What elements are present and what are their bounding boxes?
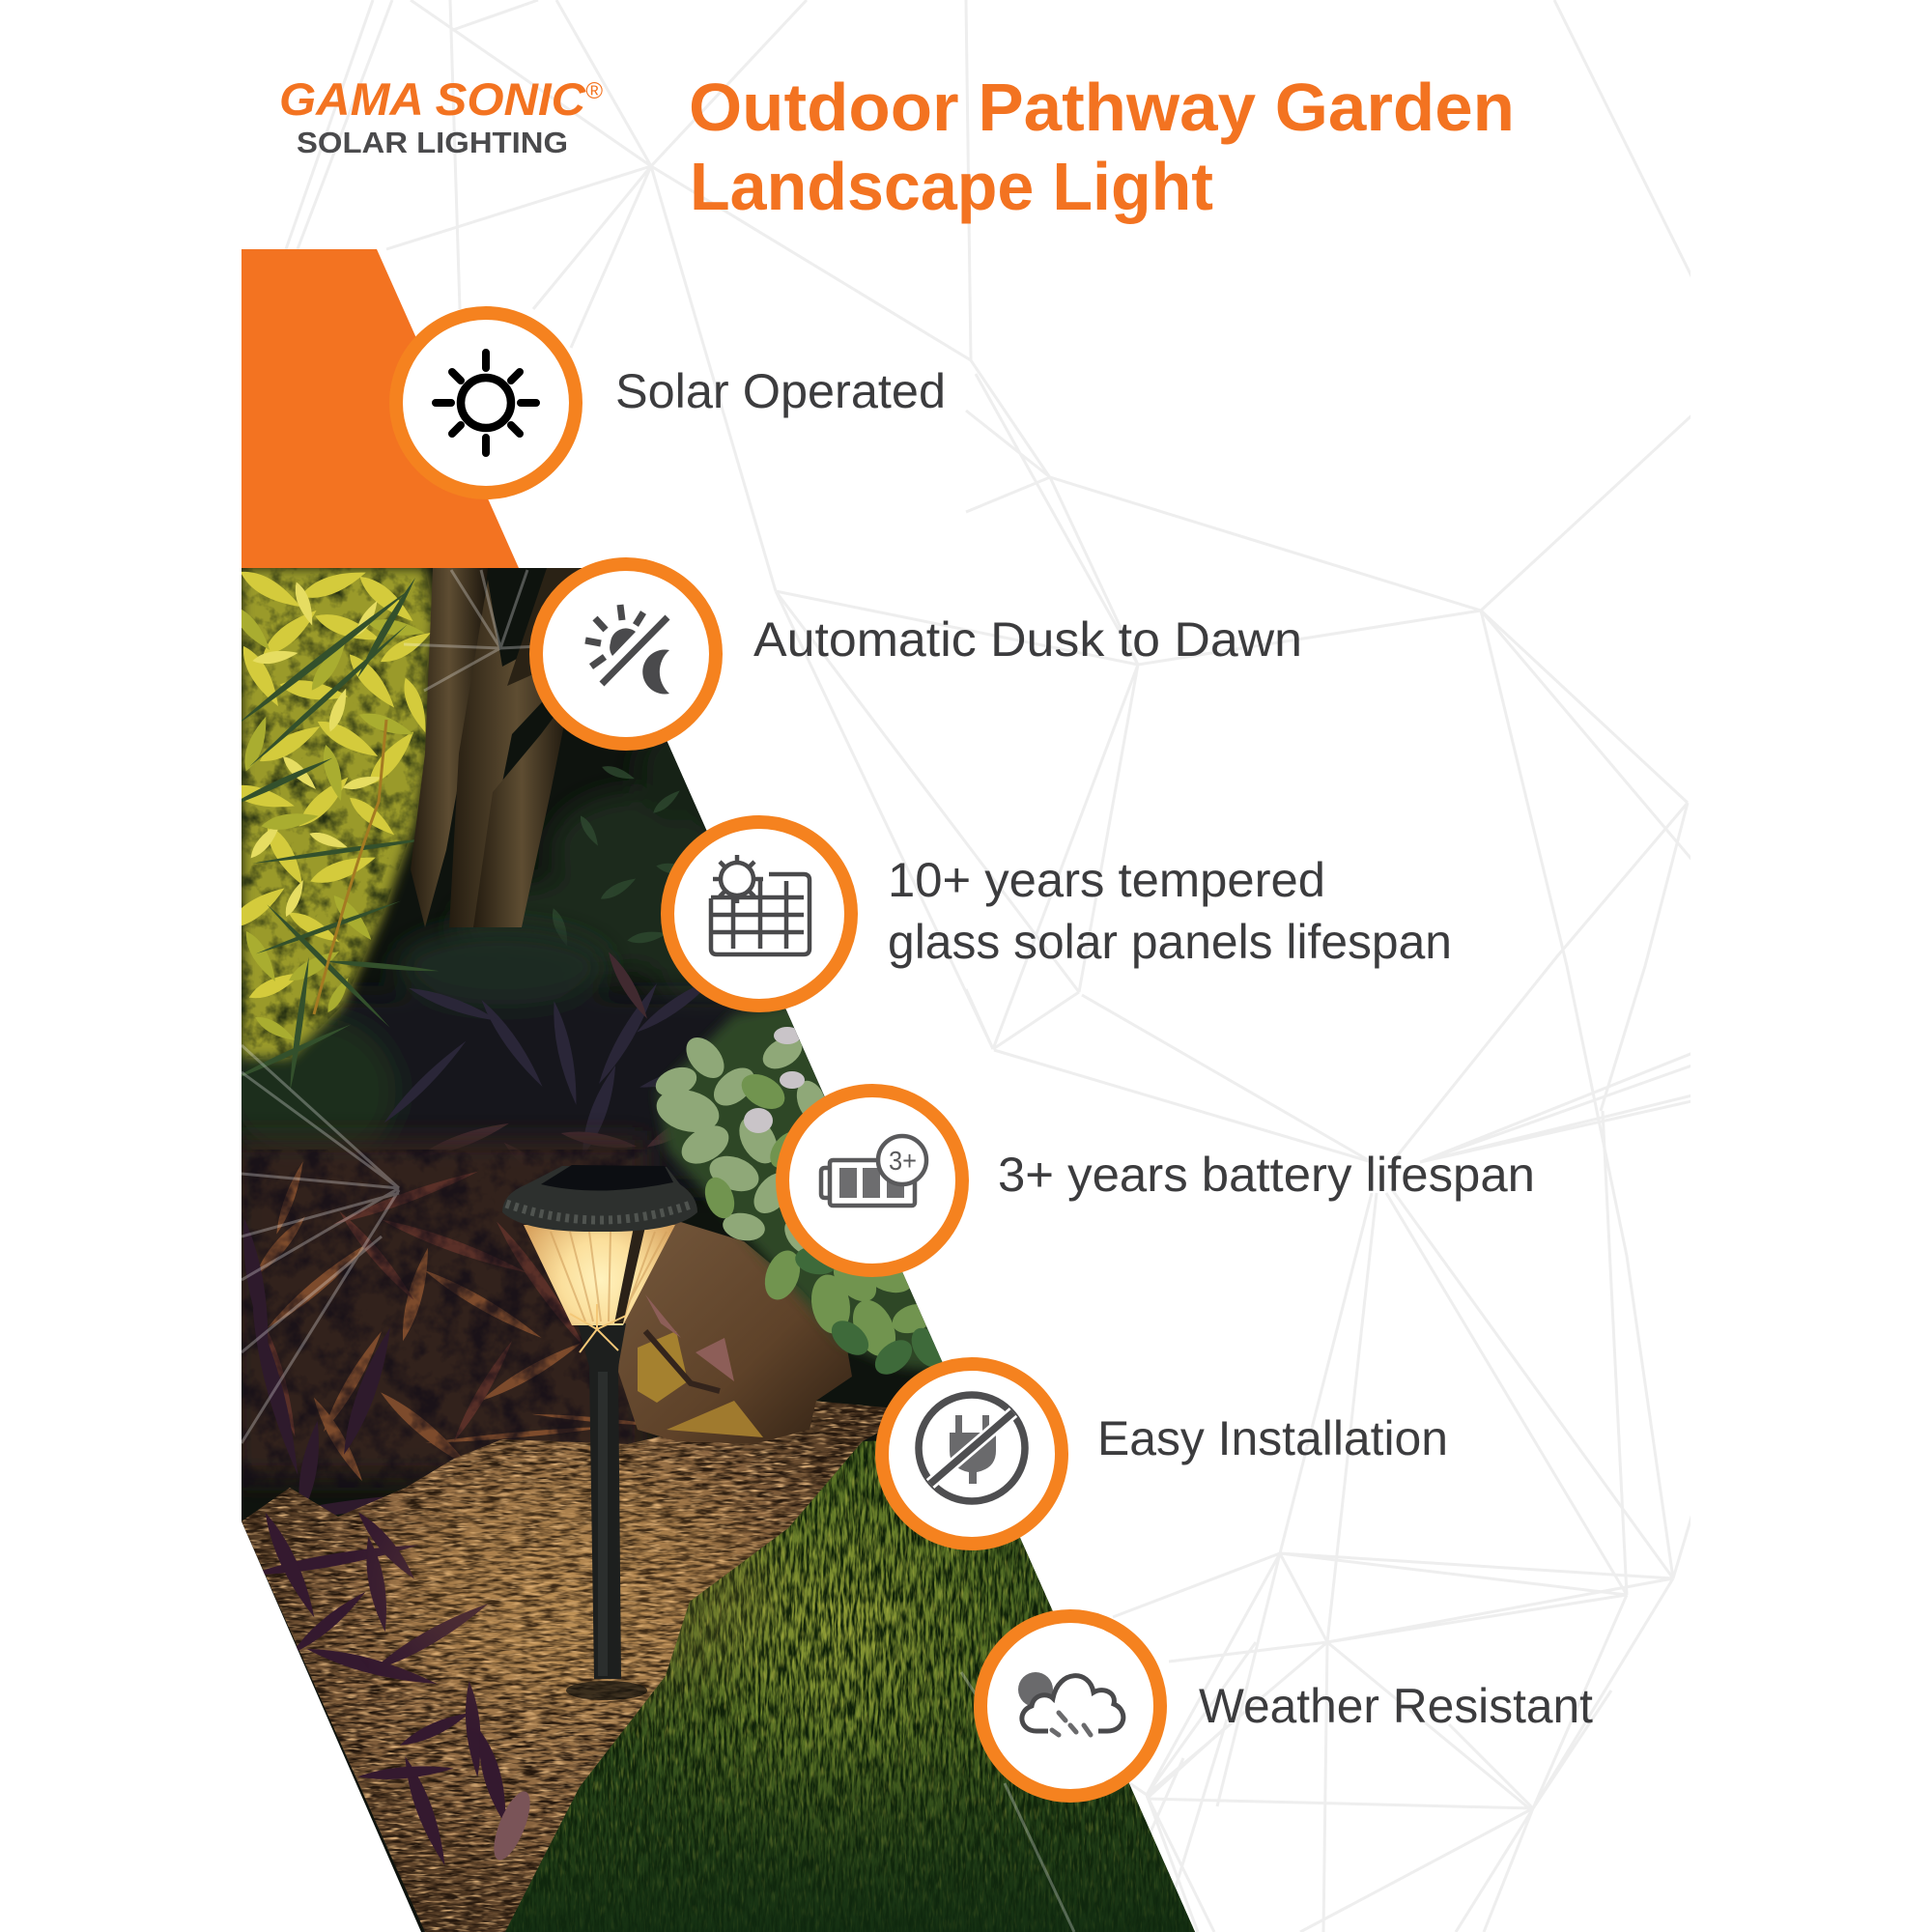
- feature 2: Automatic Dusk to Dawn: [536, 564, 1302, 744]
- photo: pine straw ground: [242, 1401, 918, 1932]
- feature 5: Easy Installation: [882, 1364, 1448, 1544]
- photo: tree trunks: [411, 568, 584, 927]
- feature 5: Easy Installation: Easy Installation: [1097, 1411, 1448, 1465]
- icon badge: sun: [396, 313, 576, 493]
- feature 1: Solar Operated: [396, 313, 946, 493]
- feature 1: Solar Operated: Solar Operated: [615, 364, 946, 418]
- title: Outdoor Pathway Garden: [689, 70, 1515, 145]
- feature 6: Weather Resistant: [980, 1616, 1593, 1796]
- photo: green lawn: [505, 1441, 1195, 1932]
- photo: green blades across the shrub: [242, 578, 439, 1090]
- icon badge: battery 3+: [782, 1091, 962, 1270]
- feature 6: Weather Resistant: Weather Resistant: [1199, 1679, 1593, 1733]
- icon badge: sun and moon: [536, 564, 716, 744]
- title: Landscape Light: [690, 149, 1213, 224]
- photo: dark purple foliage band: [222, 927, 811, 1188]
- icon badge: no plug: [882, 1364, 1062, 1544]
- feature 3: tempered glass solar panels: 10+ years tempered: [888, 853, 1325, 907]
- title: [689, 70, 1515, 224]
- background: geometric line pattern: [286, 0, 1700, 1932]
- logo: Gama Sonic Solar Lighting: ®: [585, 78, 603, 104]
- photo: solar path light: [502, 1165, 697, 1700]
- photo: lamp light glow on ground: [386, 1468, 773, 1700]
- feature 3: tempered glass solar panels: glass solar panels lifespan: [888, 915, 1452, 969]
- photo: dark green shrubs top right: [462, 742, 709, 999]
- photo base: dark background foliage: [242, 568, 1208, 1932]
- photo: terracotta pot: [618, 1219, 852, 1444]
- photo: yellow-green foliage top left: [242, 568, 435, 1058]
- feature 4: battery lifespan: 3+ years battery lifespan: [998, 1148, 1535, 1202]
- photo: red and purple leaves: [232, 1140, 667, 1526]
- purple spiky leaves over straw: [263, 1513, 505, 1865]
- logo: Gama Sonic Solar Lighting: GAMA SONIC: [279, 73, 586, 125]
- icon badge: cloud and rain: [980, 1616, 1160, 1796]
- icon badge: solar panel: [668, 822, 851, 1006]
- logo: Gama Sonic Solar Lighting: SOLAR LIGHTING: [297, 126, 568, 159]
- feature 4: battery lifespan: [782, 1091, 1535, 1270]
- orange angled header panel: [242, 249, 519, 568]
- feature 2: Automatic Dusk to Dawn: Automatic Dusk to Dawn: [753, 612, 1302, 667]
- feature 3: tempered glass solar panels: [668, 822, 1452, 1006]
- logo: Gama Sonic Solar Lighting: [279, 73, 603, 159]
- icon badge: battery 3+: 3+: [889, 1146, 917, 1176]
- photo: solar pathway light in a garden at dusk: [222, 564, 1236, 1932]
- photo: overlaid pattern lines: [242, 570, 1074, 1932]
- photo: green succulent bush: [652, 1000, 952, 1381]
